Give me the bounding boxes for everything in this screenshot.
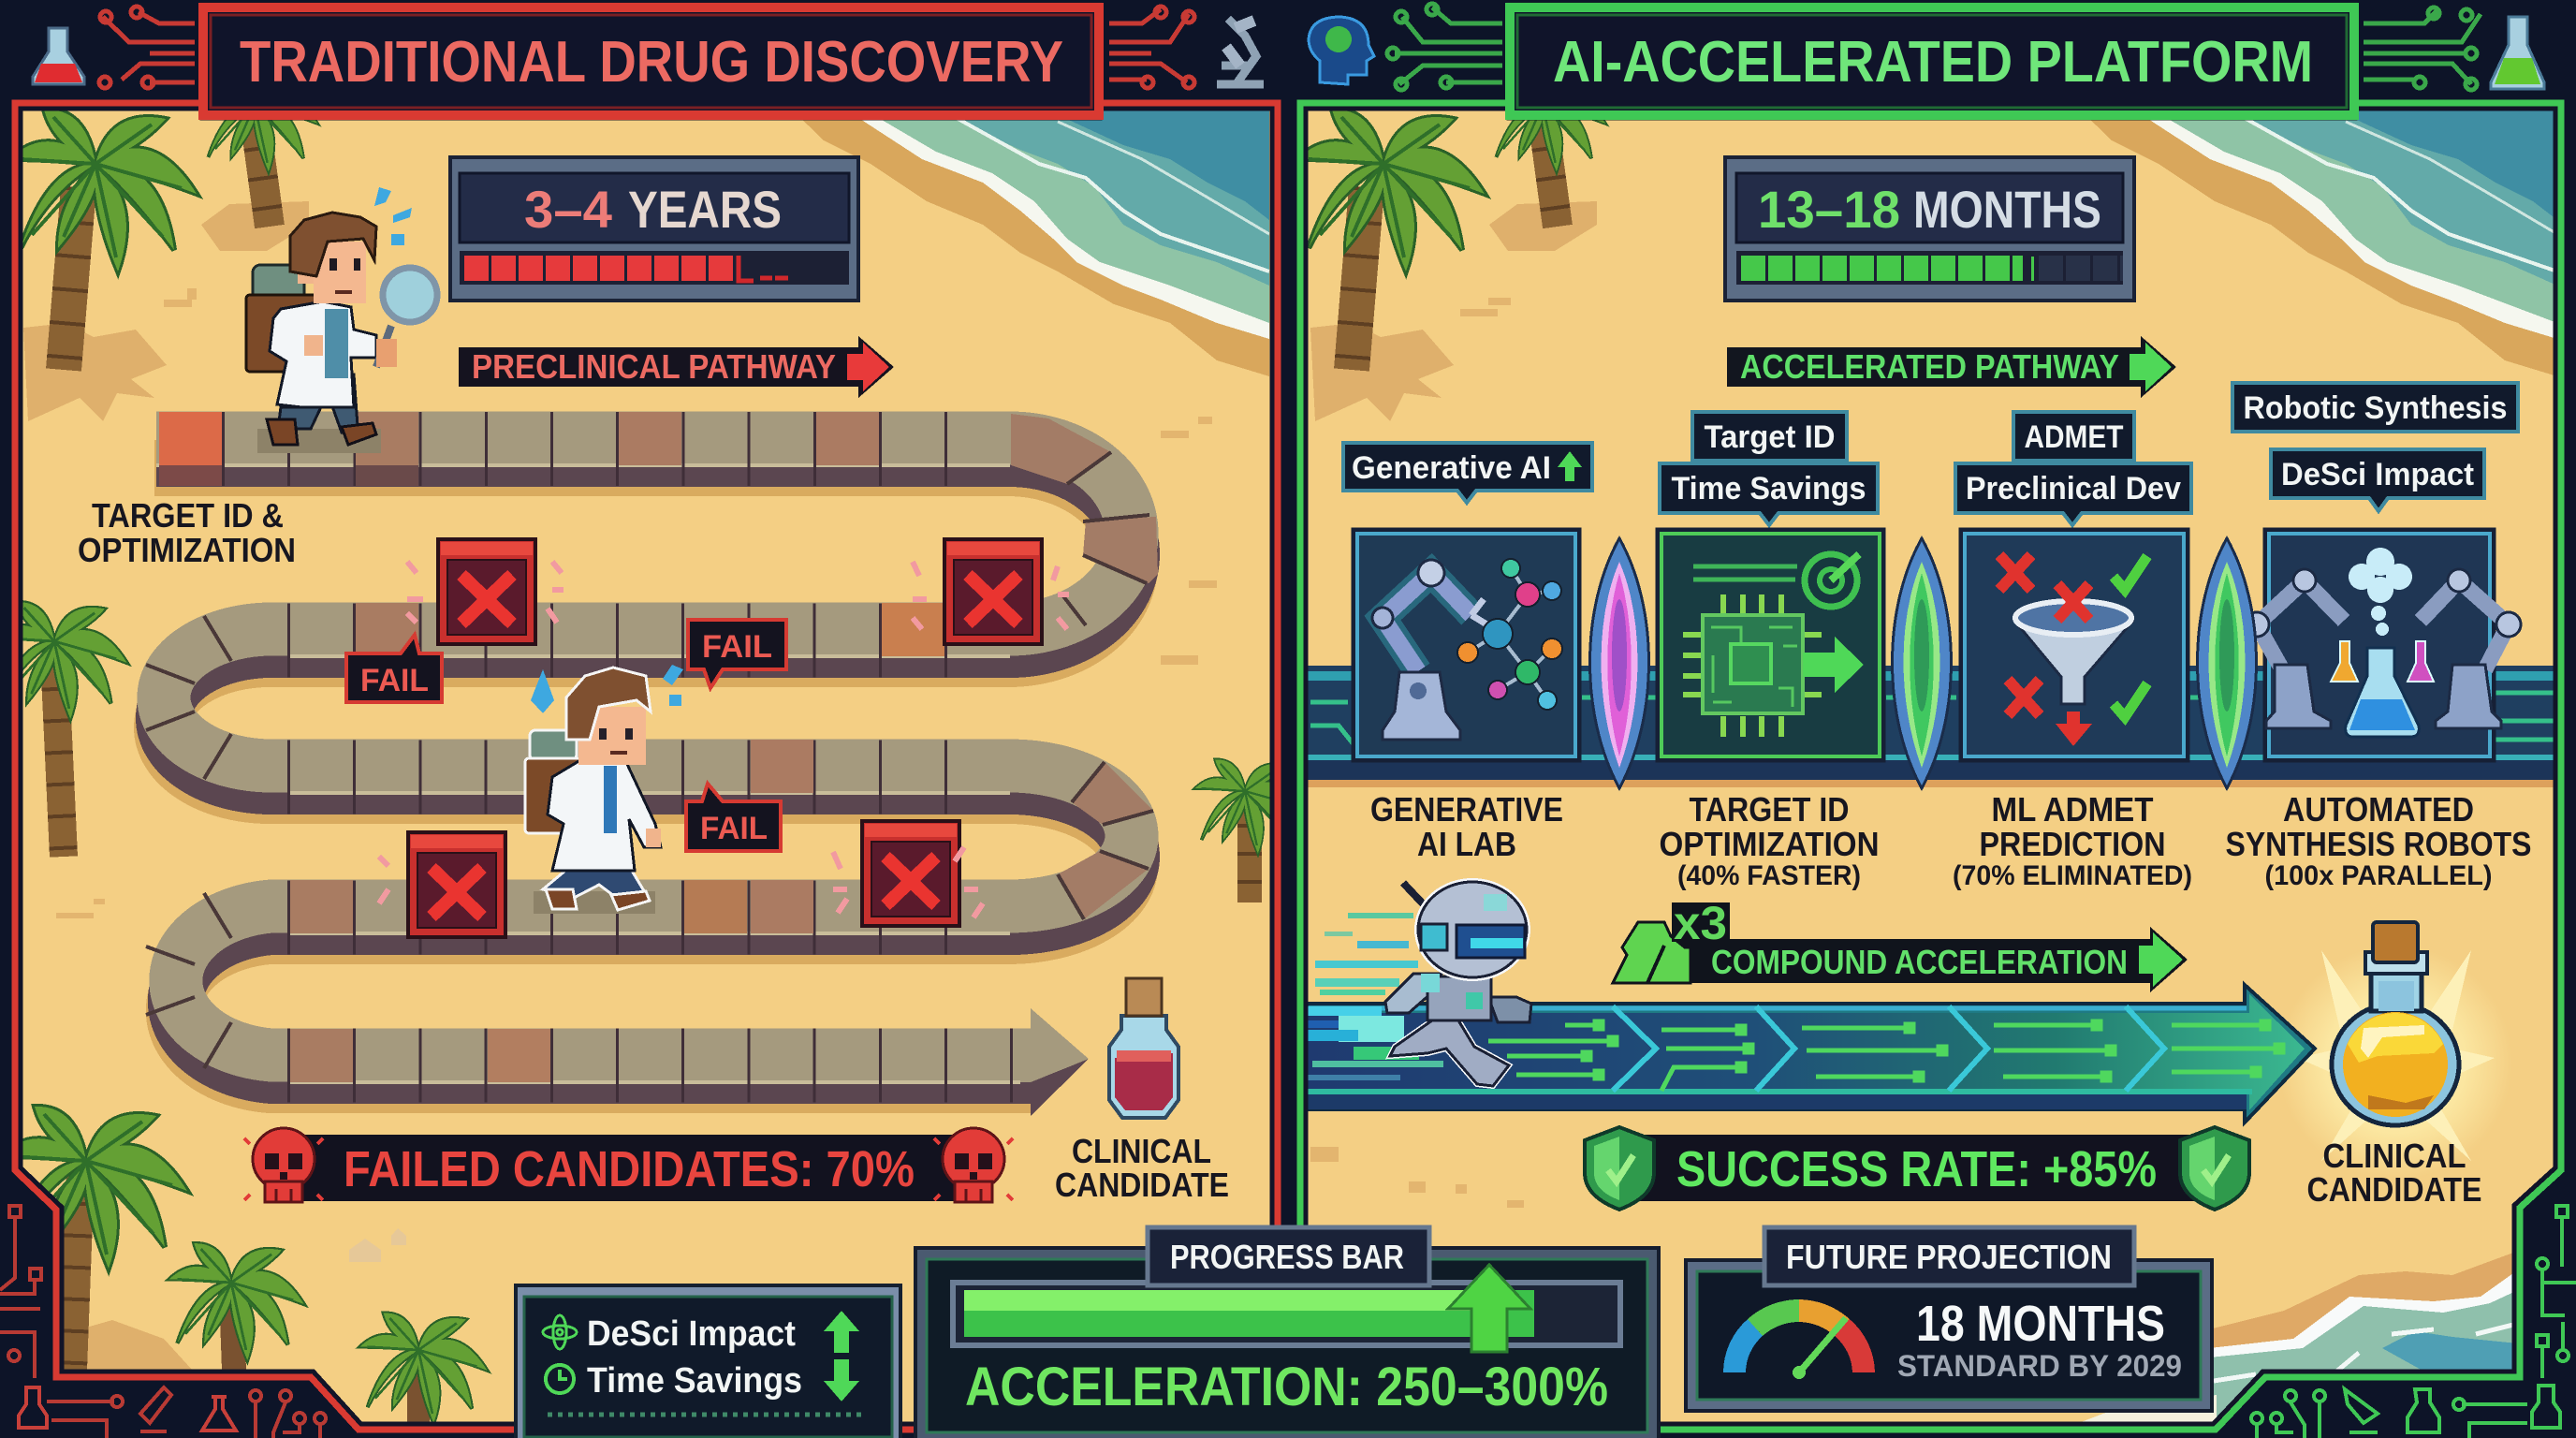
pathway label: preclinical: PRECLINICAL PATHWAY [472,347,836,386]
icon: small flask [19,1387,47,1428]
label: ml admet prediction: ML ADMET [1992,790,2154,829]
speed streaks [1307,913,1443,1080]
label: ml admet prediction [1953,790,2192,891]
panel: ai platform [1297,71,2561,1432]
robot runner [1385,880,1531,1086]
path arrowhead [1020,1008,1089,1116]
compound acceleration label: COMPOUND ACCELERATION [1711,943,2128,981]
timer panel: 3-4 years [450,157,858,301]
failed candidates banner [244,1128,1013,1202]
small rocks [349,1228,406,1262]
progress bar panel [915,1227,1659,1438]
label: target id optimization: TARGET ID [1689,790,1850,829]
icon: red flask [33,28,84,84]
label: ml admet prediction: (70% ELIMINATED) [1953,860,2192,891]
timer panel: 13-18 months: MONTHS [1913,180,2101,239]
panel: traditional pathway [0,71,1304,1430]
circuit decoration bottom left [0,1206,326,1438]
palm trees right [1309,110,1610,421]
pathway label: preclinical [459,336,894,398]
portal 3 [2198,538,2256,788]
pathway label: accelerated [1727,336,2176,398]
failed candidates banner: FAILED CANDIDATES: 70% [344,1141,915,1197]
callout: robotic synthesis [2232,383,2518,432]
desci legend box [516,1285,900,1438]
label: target id and optimization: OPTIMIZATION [78,531,296,569]
label: generative ai lab: GENERATIVE [1370,790,1563,829]
palm trees left [0,71,1304,1426]
circuits left of traditional title [99,7,195,88]
timer panel: 3-4 years: 3–4 [524,180,612,239]
label: automated synthesis robots: (100x PARALLEL) [2265,860,2492,891]
label: clinical candidate ai: CLINICAL [2323,1137,2466,1175]
card: automated synthesis [2245,530,2521,760]
label: generative ai lab: AI LAB [1417,825,1516,863]
sand specks left [56,288,1217,918]
desci legend box: Time Savings [587,1361,802,1401]
compound acceleration label [1613,897,2188,992]
icon: atom [543,1315,577,1349]
beach sand left [15,103,1278,1430]
scientist tired [525,665,683,914]
label: automated synthesis robots [2226,790,2531,891]
sand specks right [1310,298,1524,1208]
callout: target id: Target ID [1704,419,1835,455]
label: ml admet prediction: PREDICTION [1979,825,2166,863]
circuits left of ai title [1387,4,1502,90]
title banner: ai [1508,4,2356,119]
callout: robotic synthesis: Robotic Synthesis [2243,390,2507,426]
label: clinical candidate ai [2306,1137,2482,1209]
failure blocks [379,539,1069,937]
desci legend box: DeSci Impact [587,1314,796,1354]
label: clinical candidate traditional: CANDIDATE [1055,1166,1229,1204]
label: target id optimization: OPTIMIZATION [1659,825,1880,863]
fail tag 2 [688,620,786,688]
progress track [953,1283,1620,1345]
callout: generative ai [1343,443,1592,503]
title banner: traditional: TRADITIONAL DRUG DISCOVERY [240,30,1063,95]
circuits right of traditional title [1109,7,1194,88]
card: ml admet prediction [1961,530,2188,760]
pathway label: accelerated: ACCELERATED PATHWAY [1740,347,2119,386]
title banner: ai: AI-ACCELERATED PLATFORM [1553,30,2313,95]
dotted strip [548,1412,866,1417]
success rate banner: SUCCESS RATE: +85% [1676,1141,2157,1197]
callout: desci impact: DeSci Impact [2281,457,2474,492]
circuit track band [1307,666,2557,787]
fail tag 1 [346,635,442,702]
callout: time savings [1660,463,1878,525]
label: generative ai lab [1370,790,1563,863]
progress fill [964,1290,1534,1337]
label: clinical candidate traditional: CLINICAL [1072,1132,1211,1170]
label: target id optimization [1659,790,1880,891]
icon: ai head brain [1309,17,1374,84]
icon: clock [546,1365,574,1393]
card: generative ai lab [1354,530,1579,760]
card: target id optimization [1658,530,1883,760]
label: clinical candidate traditional [1055,1132,1229,1204]
beach sand right [1300,103,2561,1430]
gauge [1734,1311,1864,1379]
callout: generative ai: Generative AI [1352,450,1551,486]
icon: small microscope green [2345,1389,2378,1432]
callout: time savings: Time Savings [1672,471,1866,506]
vial: clinical candidate [1109,978,1178,1118]
callout: admet [2013,412,2134,461]
bottom right shoreline [2083,1253,2512,1421]
label: target id and optimization [78,496,296,569]
title banner: traditional [201,4,1101,119]
icon: small erlenmeyer [202,1397,236,1431]
ocean left [793,110,1269,376]
tab: progress bar [1148,1227,1429,1285]
path tint tiles [159,412,944,1082]
fail tag 3 [686,784,781,851]
red border [15,103,1278,1430]
big circuit acceleration arrow [1307,985,2315,1123]
gold flask [2332,922,2459,1125]
timer panel: 13-18 months: 13–18 [1758,180,1900,239]
circuits right of ai title [2364,7,2481,90]
standard by 2029: STANDARD BY 2029 [1897,1349,2182,1383]
winding stone path [146,414,1158,1085]
callout: target id [1692,412,1847,461]
arrows: desci up time down [824,1311,859,1401]
label: target id and optimization: TARGET ID & [92,496,284,535]
label: target id optimization: (40% FASTER) [1677,860,1861,891]
label: automated synthesis robots: AUTOMATED [2283,790,2474,829]
circuit decoration bottom right [2251,1206,2576,1438]
label: automated synthesis robots: SYNTHESIS ROBOTS [2226,825,2531,863]
portal 2 [1893,538,1951,788]
compound acceleration label: x3 [1674,897,1727,949]
scientist with magnifier [246,187,437,453]
icon: small microscope [140,1387,171,1431]
ocean right [2081,110,2557,376]
tab: future projection: FUTURE PROJECTION [1786,1238,2112,1276]
success rate banner [1585,1127,2249,1210]
callout: preclinical dev: Preclinical Dev [1966,471,2181,506]
up arrow [1448,1265,1530,1352]
fail tag 2: FAIL [702,629,772,665]
acceleration value: ACCELERATION: 250–300% [965,1357,1608,1417]
tab: progress bar: PROGRESS BAR [1170,1238,1404,1276]
icon: small flask green [2408,1389,2439,1432]
timer panel: 3-4 years: YEARS [628,180,782,239]
icon: small beaker green [2532,1386,2560,1428]
fail tag 1: FAIL [360,663,429,698]
tab: future projection [1764,1227,2134,1285]
future months: 18 MONTHS [1916,1296,2165,1352]
green border [1300,103,2561,1430]
fail tag 3: FAIL [700,811,768,846]
gold flask glow [2278,946,2512,1180]
icon: microscope [1217,19,1264,84]
callout: preclinical dev [1955,463,2191,525]
portal 1 [1589,538,1649,788]
callout: desci impact [2271,449,2484,511]
label: clinical candidate ai: CANDIDATE [2306,1170,2482,1209]
timer panel: 13-18 months [1725,157,2134,301]
callout: admet: ADMET [2024,419,2124,455]
future projection panel [1686,1227,2212,1411]
icon: green flask [2491,17,2544,89]
